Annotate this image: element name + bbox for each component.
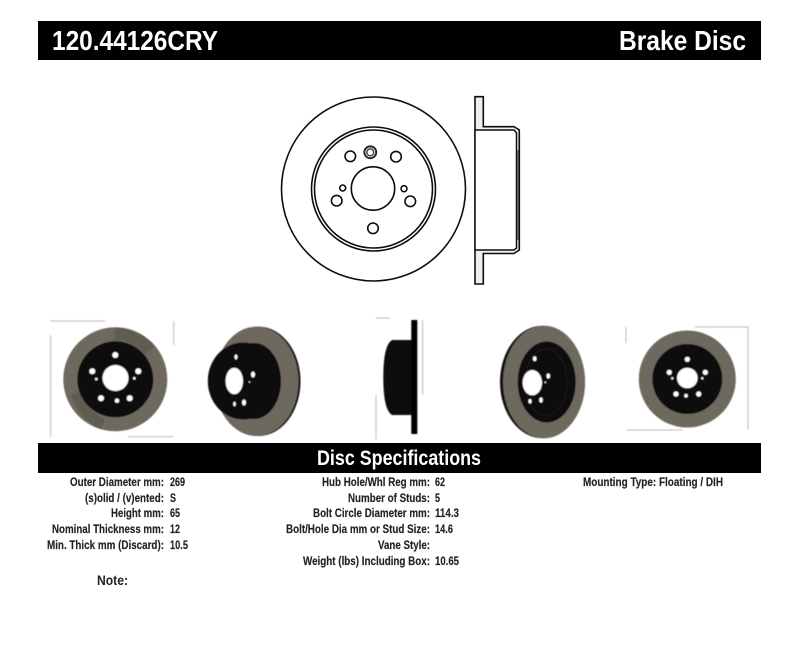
photo: disc front view (50, 321, 174, 437)
specs column: middle: Vane Style: (378, 538, 430, 552)
product type: Brake Disc (619, 25, 746, 56)
header bar (38, 21, 761, 60)
part number: 120.44126CRY (52, 25, 218, 56)
specs column: middle: Bolt/Hole Dia mm or Stud Size: (286, 522, 430, 536)
specs column: middle: Weight (lbs) Including Box: (303, 554, 430, 568)
specs column: middle: 5 (435, 491, 440, 505)
specs column: middle: Hub Hole/Whl Reg mm: (322, 475, 430, 489)
photo: disc side view (376, 318, 423, 440)
specs column: middle: 14.6 (435, 522, 453, 536)
specifications heading bar (38, 443, 761, 473)
specs column: middle: Bolt Circle Diameter mm: (313, 506, 430, 520)
specs column: left: 65 (170, 506, 180, 520)
photo: disc angled view, hat side (208, 327, 300, 436)
technical drawing: front view of disc (282, 97, 466, 281)
specs column: left: S (170, 491, 176, 505)
specs column: left: Height mm: (111, 506, 164, 520)
specs column: middle: 114.3 (435, 506, 459, 520)
specifications heading bar: Disc Specifications (317, 447, 481, 470)
photo: disc angled view, mounting side (500, 326, 585, 438)
note label: Note: (97, 572, 128, 588)
specs column: left: 10.5 (170, 538, 188, 552)
specs column: left: Min. Thick mm (Discard): (47, 538, 164, 552)
specs column: left: (s)olid / (v)ented: (85, 491, 164, 505)
specs column: middle: 10.65 (435, 554, 459, 568)
specs column: left (47, 475, 188, 552)
specs column: middle: Number of Studs: (348, 491, 430, 505)
specs column: left: Outer Diameter mm: (70, 475, 164, 489)
specs column: middle: 62 (435, 475, 445, 489)
photo: disc rear view (626, 327, 748, 430)
specs column: middle (286, 475, 459, 568)
specs column: right: Mounting Type: Floating / DIH (583, 475, 723, 489)
specs column: left: 269 (170, 475, 185, 489)
technical drawing: side section of disc (475, 97, 519, 284)
specs column: left: 12 (170, 522, 180, 536)
specs column: left: Nominal Thickness mm: (52, 522, 164, 536)
